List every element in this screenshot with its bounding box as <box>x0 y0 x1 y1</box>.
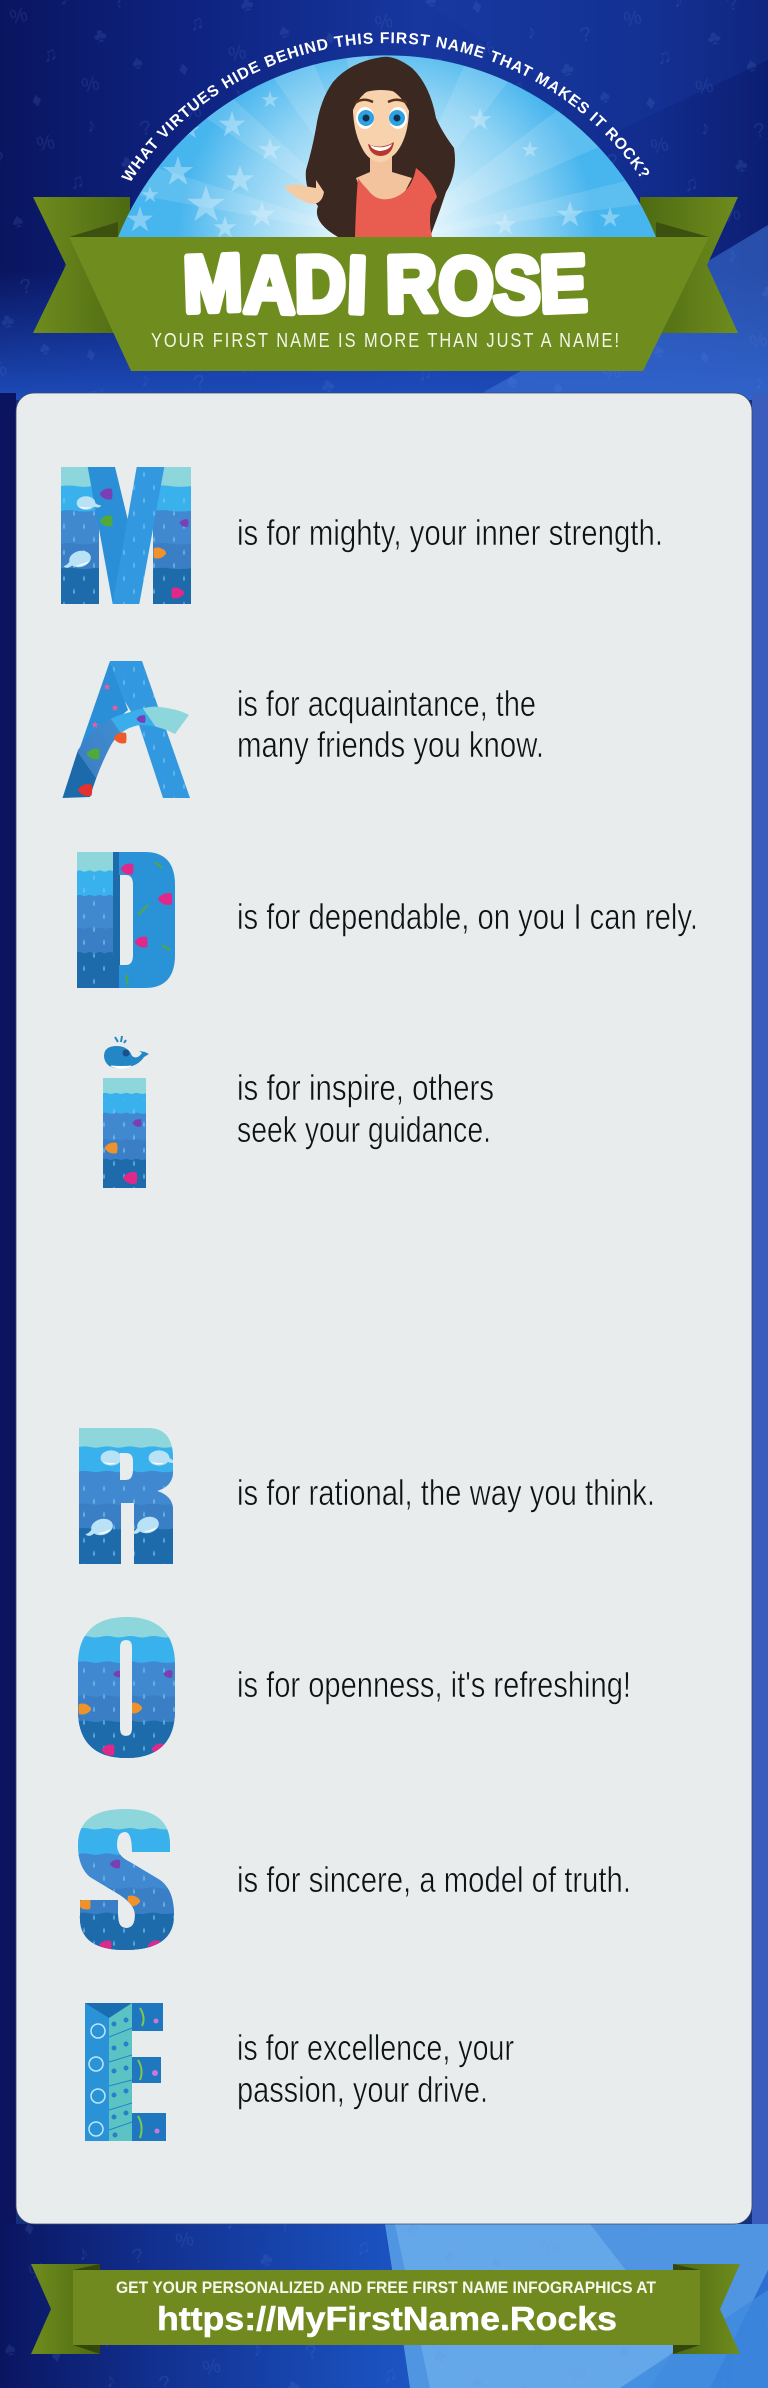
definition E: is for excellence, your <box>237 2027 514 2068</box>
shirt <box>355 168 437 237</box>
row: D <box>77 852 698 988</box>
definition E <box>237 2027 514 2110</box>
definition A <box>237 683 544 765</box>
character: woman <box>284 57 455 237</box>
letter S <box>78 1809 174 1952</box>
letter D <box>77 852 175 988</box>
definition E: passion, your drive. <box>237 2069 488 2110</box>
neck and chest <box>356 155 412 205</box>
footer call to action: GET YOUR PERSONALIZED AND FREE FIRST NAME INFOGRAPHICS AT <box>116 2279 656 2297</box>
definition A: many friends you know. <box>237 724 544 765</box>
hair front lock <box>325 170 355 237</box>
row: M <box>61 467 663 604</box>
icon: whale <box>104 1036 149 1068</box>
letter R <box>79 1428 176 1564</box>
letter E <box>85 2003 166 2141</box>
panel: letters <box>16 393 752 2224</box>
face <box>353 90 409 162</box>
row: I <box>103 1036 494 1188</box>
header artwork <box>33 32 738 371</box>
definition O: is for openness, it's refreshing! <box>237 1664 631 1705</box>
starburst circle <box>118 55 656 237</box>
letter O <box>78 1617 175 1758</box>
footer banner <box>31 2264 740 2354</box>
definition A: is for acquaintance, the <box>237 683 536 724</box>
arm and hand <box>284 180 324 204</box>
definition M: is for mighty, your inner strength. <box>237 512 663 553</box>
ribbon main <box>73 2270 700 2345</box>
row: E <box>85 2003 514 2141</box>
definition S: is for sincere, a model of truth. <box>237 1859 631 1900</box>
definition R: is for rational, the way you think. <box>237 1472 655 1513</box>
title: MADI ROSE <box>181 238 589 331</box>
letter A <box>62 661 190 798</box>
definition I: seek your guidance. <box>237 1109 491 1150</box>
curved question text: WHAT VIRTUES HIDE BEHIND THIS FIRST NAME THAT MAKES IT ROCK? <box>121 32 650 181</box>
letter M <box>61 467 191 604</box>
ribbon tails <box>31 2264 740 2354</box>
subtitle: YOUR FIRST NAME IS MORE THAN JUST A NAME! <box>151 328 619 351</box>
letter I with whale <box>103 1036 149 1188</box>
definition I <box>237 1067 494 1150</box>
panel background <box>16 393 752 2224</box>
green banner <box>69 237 709 371</box>
row: R <box>79 1428 655 1564</box>
row: O <box>78 1617 631 1758</box>
hair back <box>306 57 455 237</box>
definition I: is for inspire, others <box>237 1067 494 1108</box>
ribbon tails <box>33 197 738 333</box>
row: A <box>62 661 544 798</box>
footer url: https://MyFirstName.Rocks <box>157 2300 617 2337</box>
row: S <box>78 1809 631 1952</box>
